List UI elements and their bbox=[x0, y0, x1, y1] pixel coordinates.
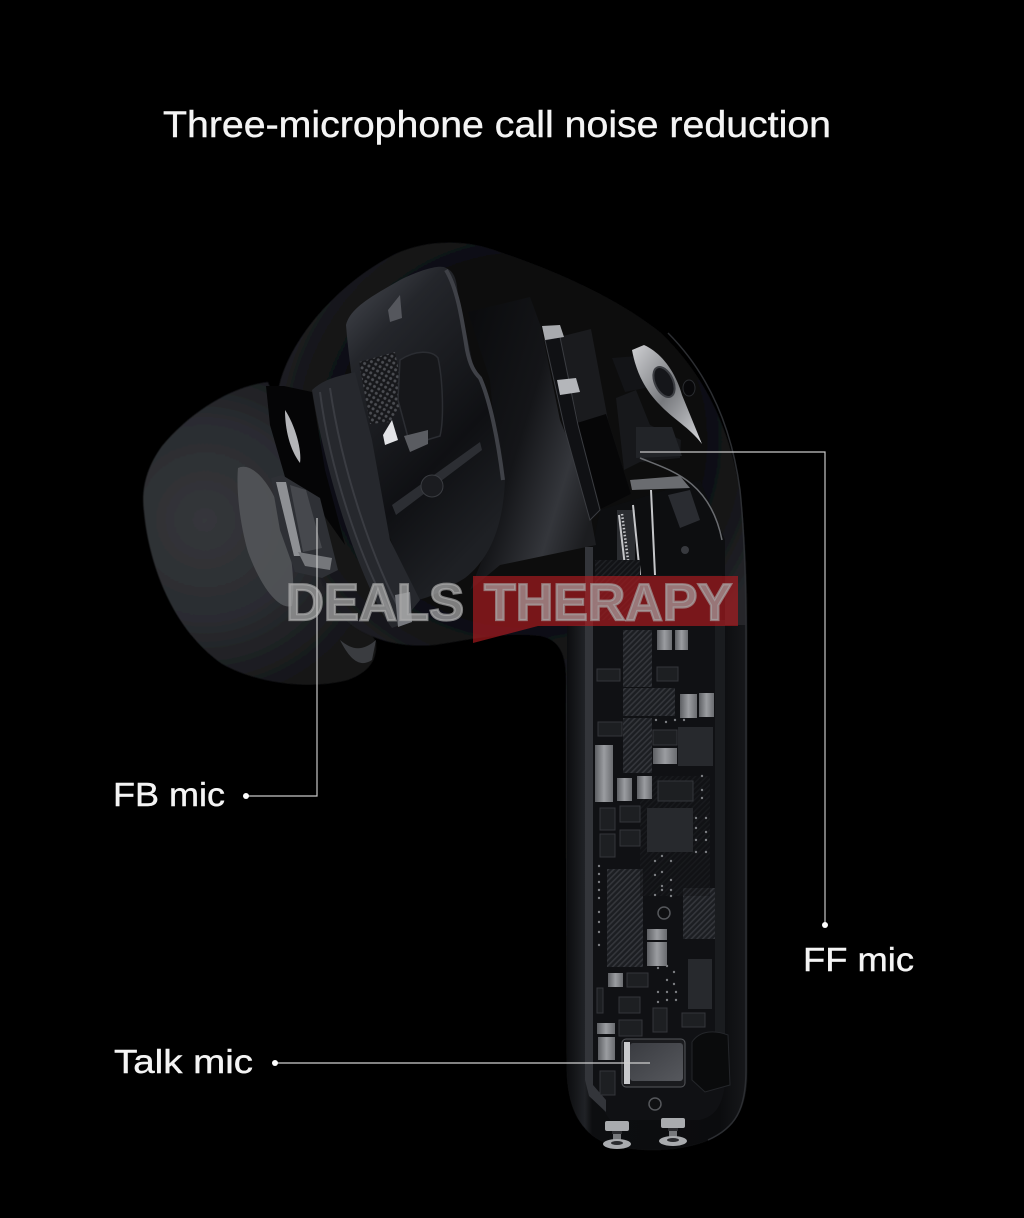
bottom charging pins bbox=[603, 1118, 687, 1149]
flex ribbon bbox=[617, 458, 722, 580]
watermark word: THERAPY: THERAPY bbox=[484, 574, 732, 632]
round nub bbox=[421, 475, 443, 497]
driver cover rim bbox=[446, 270, 503, 480]
driver rear barrel bbox=[468, 297, 596, 590]
bracket hole bbox=[649, 364, 679, 400]
watermark bbox=[286, 574, 738, 643]
FB mic module bbox=[271, 475, 338, 578]
callout: FF mic: FF mic bbox=[803, 941, 914, 978]
flange tab bbox=[395, 592, 412, 627]
inner tab lower bbox=[404, 430, 428, 452]
solder dots bbox=[599, 720, 706, 1002]
pin one bbox=[603, 1121, 631, 1149]
connector left edge bbox=[545, 337, 600, 520]
pin two bbox=[659, 1118, 687, 1146]
crystal component bbox=[622, 1039, 685, 1087]
silver bracket ring bbox=[632, 345, 702, 444]
left translucent strip bbox=[585, 547, 606, 1112]
rear port window bbox=[398, 352, 442, 445]
connector block bbox=[559, 329, 631, 509]
upper board area bbox=[590, 480, 725, 625]
connector lower dark block bbox=[577, 414, 631, 509]
inner tab bbox=[383, 420, 398, 445]
callout: FB mic bbox=[113, 518, 317, 813]
battery contact recess bbox=[692, 1032, 730, 1092]
FF mic module bbox=[612, 355, 682, 470]
earbud illustration bbox=[143, 242, 747, 1150]
flange grooves bbox=[320, 388, 404, 620]
stem shell edge highlight bbox=[668, 333, 746, 1140]
eartip translucent oval bbox=[237, 467, 293, 607]
shell port bbox=[683, 380, 695, 396]
driver front cover bbox=[346, 267, 505, 600]
mesh window bbox=[359, 352, 405, 424]
earbud head and stem shell bbox=[279, 242, 747, 1150]
stem circuit board bbox=[585, 547, 730, 1120]
bright lower lip of eartip bbox=[340, 640, 376, 663]
driver housing flange bbox=[312, 372, 420, 628]
plain chips bbox=[647, 727, 713, 1009]
dark gap between eartip and driver bbox=[266, 386, 345, 545]
hatched chips bbox=[595, 560, 715, 967]
watermark word: DEALS: DEALS bbox=[286, 574, 464, 632]
board base bbox=[593, 575, 725, 1120]
stem shell shading bbox=[567, 625, 747, 1150]
callout: Talk mic: Talk mic bbox=[114, 1043, 253, 1080]
callout: FB mic: FB mic bbox=[113, 776, 225, 813]
callout: FF mic bbox=[640, 452, 914, 978]
inner diagonal band bbox=[392, 442, 482, 515]
eartip bbox=[143, 382, 376, 685]
small dark components bbox=[597, 667, 705, 1095]
watermark red ribbon bbox=[473, 576, 738, 643]
callout: Talk mic bbox=[114, 1043, 650, 1080]
metal capacitors bbox=[595, 630, 714, 1060]
contact pins bbox=[542, 325, 580, 395]
title: Three-microphone call noise reduction bbox=[163, 104, 831, 145]
board screws bbox=[649, 907, 670, 1110]
side highlight bbox=[285, 410, 300, 463]
cover upper ridge bbox=[388, 295, 402, 322]
right translucent strip bbox=[715, 620, 725, 1085]
